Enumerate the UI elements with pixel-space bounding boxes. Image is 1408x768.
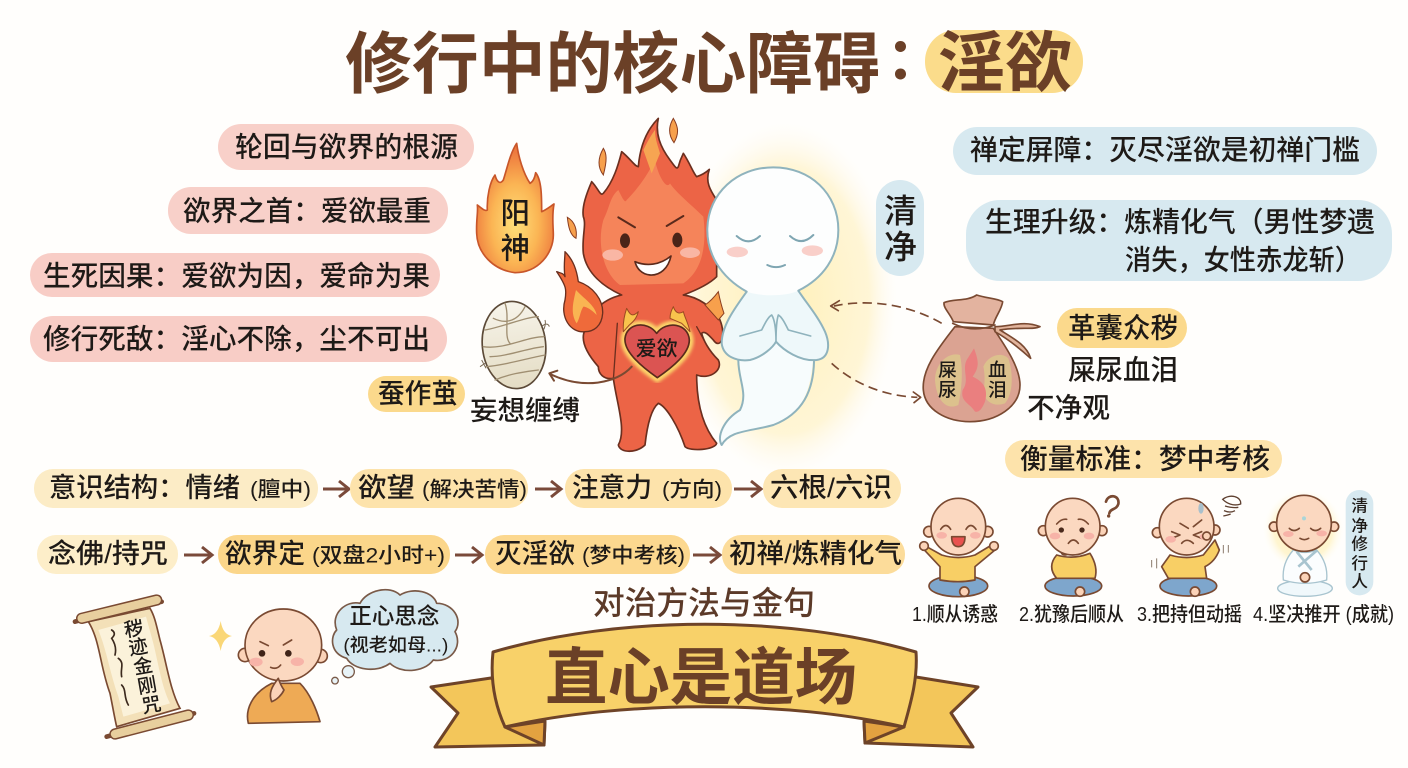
icon: skin bag: [923, 295, 1040, 422]
pill: physiological upgrade: 生理升级：炼精化气（男性梦遗: [985, 206, 1375, 238]
pill: head of desire realm: 欲界之首：爱欲最重: [183, 196, 431, 226]
flow: practice path: [37, 535, 905, 574]
pill: purity vertical label: 净: [884, 228, 917, 266]
icon: skin bag: 血: [988, 359, 1007, 380]
pill: physiological upgrade: 消失，女性赤龙斩）: [1125, 244, 1361, 276]
heart glow: [625, 325, 689, 378]
icon: skin bag: 尿: [938, 379, 957, 400]
step: end lust: 灭淫欲: [495, 539, 575, 569]
step: emotion: 意识结构：情绪: [49, 473, 240, 503]
panel: left root causes: [30, 124, 474, 362]
callout: thought bubble: (视老如母...): [343, 634, 448, 655]
icon: yang spirit flame: 神: [501, 226, 530, 268]
pill: purity vertical label: 清: [884, 192, 917, 230]
pill: pure practitioner: [1346, 490, 1373, 595]
step: attention: 注意力: [572, 473, 652, 503]
label: stage 3: 3.把持但动摇: [1137, 603, 1242, 626]
body lines: [613, 323, 704, 380]
pill: cause and effect: [30, 253, 440, 297]
pill: deadly enemy: [30, 316, 447, 362]
pill: cause and effect: 生死因果：爱欲为因，爱命为果: [43, 260, 430, 292]
icon: yang spirit flame: [477, 143, 554, 273]
icon: mantra scroll: 金: [132, 654, 155, 679]
step: attention: [565, 469, 732, 508]
monk 3: wavers: [1152, 496, 1241, 596]
pill: pure practitioner: 行: [1351, 554, 1368, 573]
arrow: [323, 481, 349, 497]
pill: pure practitioner: 清: [1351, 496, 1368, 515]
panel: four practitioners: [920, 488, 1373, 597]
step: emotion: [34, 469, 318, 508]
pill: root of samsara: [218, 124, 474, 170]
title: ：: [886, 12, 944, 96]
label: stage 4: 4.坚决推开 (成就): [1253, 603, 1394, 626]
label: leather bag of filth: 革囊众秽: [1068, 312, 1178, 344]
step: end lust: [485, 535, 690, 574]
text: filth list: 屎尿血泪: [1068, 354, 1178, 386]
pill: head of desire realm: [168, 187, 448, 234]
arrow: [535, 481, 561, 497]
heading: measuring standard: 衡量标准：梦中考核: [1020, 444, 1270, 474]
callout: thought bubble: 正心思念: [349, 603, 439, 629]
arrow: [693, 547, 720, 563]
main ribbon: [492, 624, 916, 727]
label: leather bag of filth: [1057, 308, 1187, 348]
arrow: [455, 547, 482, 563]
pill: physiological upgrade: [966, 200, 1392, 281]
shoulder flame: [705, 292, 724, 320]
glow behind pure figure: [673, 122, 897, 478]
icon: mantra scroll: [75, 600, 194, 737]
pill: meditation barrier: 禅定屏障：灭尽淫欲是初禅门槛: [970, 134, 1360, 166]
banner: the straight mind is the bodhimanda: 直心是道场: [545, 627, 857, 717]
monk 4: firm and pure: [1262, 488, 1345, 596]
step: end lust: (梦中考核): [582, 544, 685, 568]
pill: root of samsara: 轮回与欲界的根源: [235, 132, 458, 162]
face: [618, 216, 683, 227]
step: desire: [350, 469, 528, 508]
arrow: [184, 547, 212, 563]
hand flame: [557, 252, 603, 332]
title: 淫欲: [938, 10, 1072, 106]
icon: fire figure: [557, 118, 724, 451]
text: impurity contemplation: 不净观: [1027, 392, 1110, 424]
title: 修行中的核心障碍: [345, 10, 880, 108]
icon: mantra scroll: 迹: [127, 635, 150, 660]
panel: right benefits: [876, 127, 1392, 281]
step: desire: (解决苦情): [422, 478, 527, 502]
pill: pure practitioner: 净: [1351, 516, 1368, 535]
flow: consciousness structure: [34, 469, 901, 508]
icon: mantra scroll: 秽: [122, 617, 145, 642]
step: desire realm samadhi: [218, 535, 450, 574]
icon: pure ghost figure: [707, 167, 838, 445]
monk 1: yields: [920, 498, 998, 597]
icon: skin bag: 泪: [988, 379, 1007, 400]
arrow: heart to cocoon: [549, 367, 632, 383]
heading: remedies and golden sayings: 对治方法与金句: [593, 585, 815, 621]
label: stage 2: 2.犹豫后顺从: [1019, 603, 1124, 626]
callout: thought bubble: [332, 590, 458, 684]
pill: pure practitioner: 人: [1351, 572, 1368, 591]
pill: deadly enemy: 修行死敌：淫心不除，尘不可出: [43, 324, 430, 354]
label: silkworm cocoon: 蚕作茧: [378, 379, 458, 409]
icon: fire figure: 爱欲: [636, 337, 678, 360]
arrow: bag to ghost: [831, 301, 942, 323]
label: silkworm cocoon: [368, 376, 465, 412]
pill: purity vertical label: [876, 180, 924, 276]
step: attention: (方向): [662, 478, 722, 502]
label: stage 1: 1.顺从诱惑: [912, 603, 998, 626]
icon: skin bag: 屎: [938, 359, 957, 380]
step: desire realm samadhi: (双盘2小时+): [312, 544, 445, 568]
icon: mantra scroll: 刚: [136, 674, 159, 699]
step: six roots: [763, 469, 901, 508]
step: desire realm samadhi: 欲界定: [225, 539, 305, 569]
monk 2: hesitates: [1038, 496, 1118, 596]
step: emotion: (膻中): [250, 478, 311, 502]
step: chanting: 念佛/持咒: [48, 539, 168, 569]
pill: pure practitioner: 修: [1351, 534, 1368, 553]
pill: meditation barrier: [953, 127, 1377, 175]
banner: the straight mind is the bodhimanda: [431, 624, 978, 747]
fold shadows: [505, 721, 545, 745]
icon: sparkle: [209, 621, 232, 651]
icon: yang spirit flame: 阳: [501, 191, 530, 233]
icon: cocoon: [478, 298, 550, 392]
heart: [625, 325, 689, 378]
icon: mantra scroll: 咒: [140, 694, 163, 718]
flame body: [583, 118, 723, 451]
arrow: [734, 481, 761, 497]
step: six roots: 六根/六识: [770, 473, 892, 503]
heart flames: [623, 307, 690, 332]
step: desire: 欲望: [358, 473, 415, 503]
step: first dhyana: 初禅/炼精化气: [729, 539, 902, 569]
label: delusion binding: 妄想缠缚: [470, 396, 580, 426]
icon: thinking monk: [238, 609, 327, 723]
arrow: ghost to bag: [832, 363, 921, 403]
step: chanting: [37, 535, 178, 574]
left tail: [431, 678, 545, 747]
right tail: [864, 677, 978, 747]
